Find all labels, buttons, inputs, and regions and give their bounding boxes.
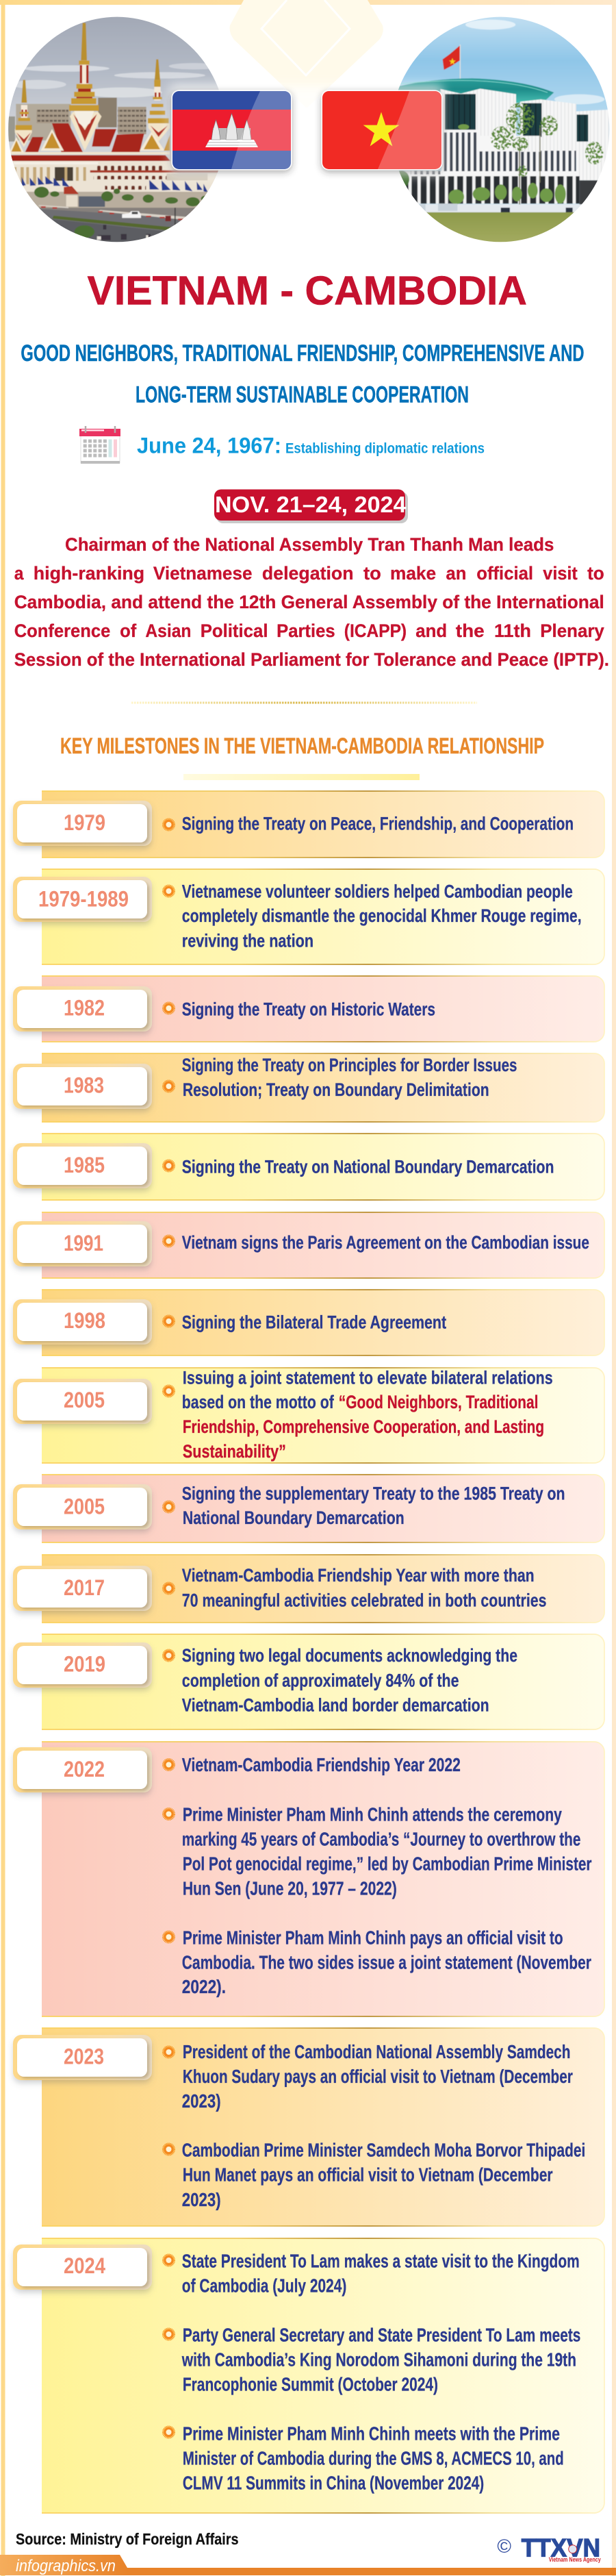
intro paragraph: a [14,563,24,584]
flag: Cambodia [171,90,292,170]
panel: 2005 joint statement: Sustainability” [183,1441,286,1462]
date of diplomatic relations: Establishing diplomatic relations [285,441,485,456]
panel: 1983: Signing the Treaty on Principles for Border Issues [182,1055,517,1075]
panel: 2019: 2019 [64,1652,105,1677]
intro paragraph: Plenary [540,621,604,641]
panel: 2024: Francophonie Summit (October 2024) [183,2374,438,2394]
date of diplomatic relations [137,433,485,458]
panel: 2022: Hun Sen (June 20, 1977 – 2022) [183,1877,397,1899]
panel: 2019: Vietnam-Cambodia land border demarcation [182,1695,489,1716]
panel: 2005 supplementary treaty: 2005 [64,1495,105,1519]
panel: 2005 supplementary treaty [13,1475,604,1542]
panel: 2019: completion of approximately 84% of the [182,1670,459,1690]
panel: 2017: Vietnam-Cambodia Friendship Year with more than [182,1565,535,1586]
intro paragraph: Parties [277,621,335,641]
panel: 2024 [13,2238,604,2513]
panel: 2024: 2024 [64,2253,105,2278]
intro paragraph: official [476,563,533,584]
panel: 2019: Signing two legal documents acknowledging the [182,1645,517,1666]
icon: calendar [79,426,120,464]
panel: 2023: 2023 [64,2044,104,2068]
panel: 2024: of Cambodia (July 2024) [182,2275,346,2297]
intro paragraph: delegation [262,563,354,584]
panel: 1982 [13,976,604,1042]
frame: right border [612,0,616,2576]
intro paragraph: Asian [145,621,192,641]
intro paragraph: Conference [14,621,110,641]
panel: 2022: 2022 [64,1757,105,1781]
panel: 2005 joint statement: based on the motto of [182,1392,335,1412]
panel: 1998: 1998 [64,1308,105,1333]
panel: 2024: CLMV 11 Summits in China (November 2024) [183,2473,484,2494]
panel: 1991 [13,1212,604,1278]
panel: 1998: Signing the Bilateral Trade Agreement [182,1312,446,1333]
intro paragraph [14,534,609,670]
panel: 1983: Resolution; Treaty on Boundary Delimitation [183,1079,489,1100]
panel: 1983: 1983 [64,1073,104,1097]
panel: 1979-1989 [13,869,604,964]
panel: 1979 [13,791,604,858]
panel: 1983 [13,1053,604,1122]
intro paragraph: high-ranking [34,563,144,584]
date badge: NOV. 21–24, 2024 [215,492,407,517]
logo: TTXVN: © [497,2536,511,2557]
frame: left border [1,0,5,2576]
panel: 1991: 1991 [64,1231,103,1255]
intro paragraph: Vietnamese [153,563,252,584]
panel: 1979: 1979 [64,810,105,835]
logo: TTXVN: Vietnam News Agency [549,2556,601,2564]
panel: 1979-1989: reviving the nation [182,930,313,951]
intro paragraph: 11th [494,621,531,641]
subtitle: LONG-TERM SUSTAINABLE COOPERATION [136,382,469,408]
panel: 2017 [13,1555,604,1623]
panel: 2017: 2017 [64,1575,105,1600]
panel: 1998 [13,1290,604,1355]
intro paragraph: the [456,621,485,641]
panel: 2022: Vietnam-Cambodia Friendship Year 2022 [182,1754,461,1775]
panel: 2005 joint statement [13,1367,604,1463]
panel: 2005 supplementary treaty: National Boundary Demarcation [183,1508,405,1528]
intro paragraph: Chairman of the National Assembly Tran Thanh Man leads [65,534,554,555]
intro paragraph: an [446,563,466,584]
intro paragraph: and [415,621,447,641]
decorative diamond emblem [230,0,383,108]
intro paragraph: to [363,563,381,584]
panel: 2022 [13,1742,604,2016]
panel: 2022: 2022). [182,1976,226,1997]
logo: TTXVN: TTXVN [522,2534,600,2562]
title: VIETNAM - CAMBODIA [88,268,527,314]
glow behind flags [171,86,442,175]
intro paragraph: Political [201,621,268,641]
subtitle [21,340,585,408]
photo: Vietnam National Assembly House [398,16,609,242]
flag: Vietnam [322,90,442,170]
panel: 1985: 1985 [64,1153,105,1177]
panel: 2005 joint statement: “Good Neighbors, Traditional [339,1392,538,1412]
intro paragraph: Cambodia, and attend the 12th General Assembly of the International [14,592,604,612]
panel: 1982: 1982 [64,996,105,1021]
intro paragraph: visit [543,563,578,584]
photo: Cambodian National Assembly [8,16,219,242]
panel: 2005 joint statement: 2005 [64,1388,105,1412]
panel: 1979-1989: 1979-1989 [38,887,129,912]
date of diplomatic relations: June 24, 1967: [137,433,281,458]
footer bar [0,2555,616,2575]
intro paragraph: to [587,563,604,584]
intro paragraph: make [390,563,436,584]
source: Source: Ministry of Foreign Affairs [16,2530,238,2548]
icon: Angkor Wat [205,114,258,147]
intro paragraph: of [120,621,137,641]
intro paragraph: (ICAPP) [344,621,407,641]
frame: top border [0,0,616,5]
panel: 2019 [13,1634,604,1729]
panel: 2023 [13,2028,604,2226]
panel: 1982: Signing the Treaty on Historic Waters [182,999,435,1019]
panel: 2023: 2023) [182,2090,221,2112]
panel: 2023: 2023) [182,2189,221,2210]
panel: 1985 [13,1134,604,1200]
footer bar: infographics.vn [16,2557,116,2575]
